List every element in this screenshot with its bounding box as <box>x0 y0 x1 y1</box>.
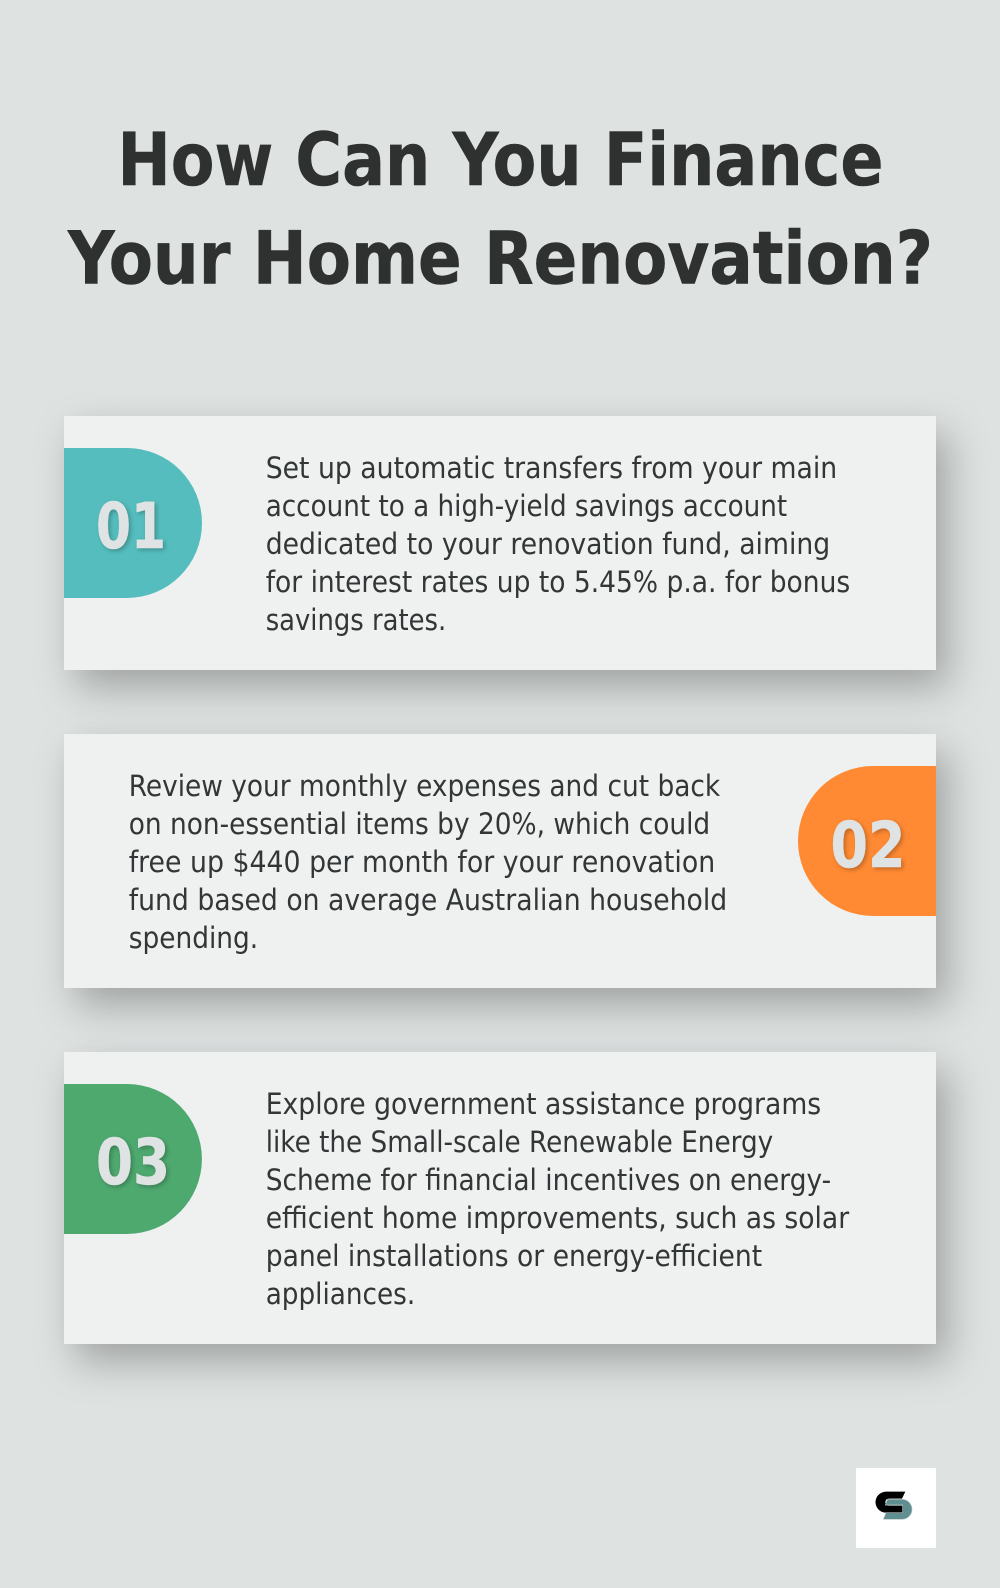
step 02 text: free up $440 per month for your renovation <box>129 845 715 879</box>
badge 03: 03 <box>96 1126 170 1199</box>
step 03 text: panel installations or energy-efficient <box>266 1239 762 1273</box>
step 02 text: spending. <box>129 921 258 955</box>
step 01 text: account to a high-yield savings account <box>266 489 787 523</box>
badge 01: 01 <box>96 490 166 563</box>
step 03 text: Scheme for financial incentives on energy- <box>266 1163 831 1197</box>
step 03 text: like the Small-scale Renewable Energy <box>266 1125 773 1159</box>
step 03 text: Explore government assistance programs <box>266 1087 821 1121</box>
step 03 text: appliances. <box>266 1277 415 1311</box>
step 02 text <box>129 769 727 955</box>
step 03 text: efficient home improvements, such as solar <box>266 1201 850 1235</box>
badge 01 <box>64 448 202 598</box>
step 02 text: on non-essential items by 20%, which could <box>129 807 710 841</box>
step 01 text: for interest rates up to 5.45% p.a. for bonus <box>266 565 850 599</box>
panel: step 01 <box>64 416 936 670</box>
step 01 text: Set up automatic transfers from your main <box>266 451 837 485</box>
card background 03 <box>64 1052 936 1344</box>
badge 02 <box>798 766 936 916</box>
panel: step 03 <box>64 1052 936 1344</box>
step 01 text: dedicated to your renovation fund, aiming <box>266 527 830 561</box>
step 01 text <box>266 451 850 637</box>
step 02 text: Review your monthly expenses and cut back <box>129 769 720 803</box>
title: How Can You Finance <box>118 118 884 203</box>
step 02 text: fund based on average Australian household <box>129 883 727 917</box>
logo <box>856 1468 936 1548</box>
badge 02: 02 <box>830 809 906 882</box>
title <box>67 118 933 302</box>
panel: step 02 <box>64 734 936 988</box>
card background 02 <box>64 734 936 988</box>
badge 03 <box>64 1084 202 1234</box>
step 03 text <box>266 1087 850 1311</box>
card background 01 <box>64 416 936 670</box>
step 01 text: savings rates. <box>266 603 446 637</box>
